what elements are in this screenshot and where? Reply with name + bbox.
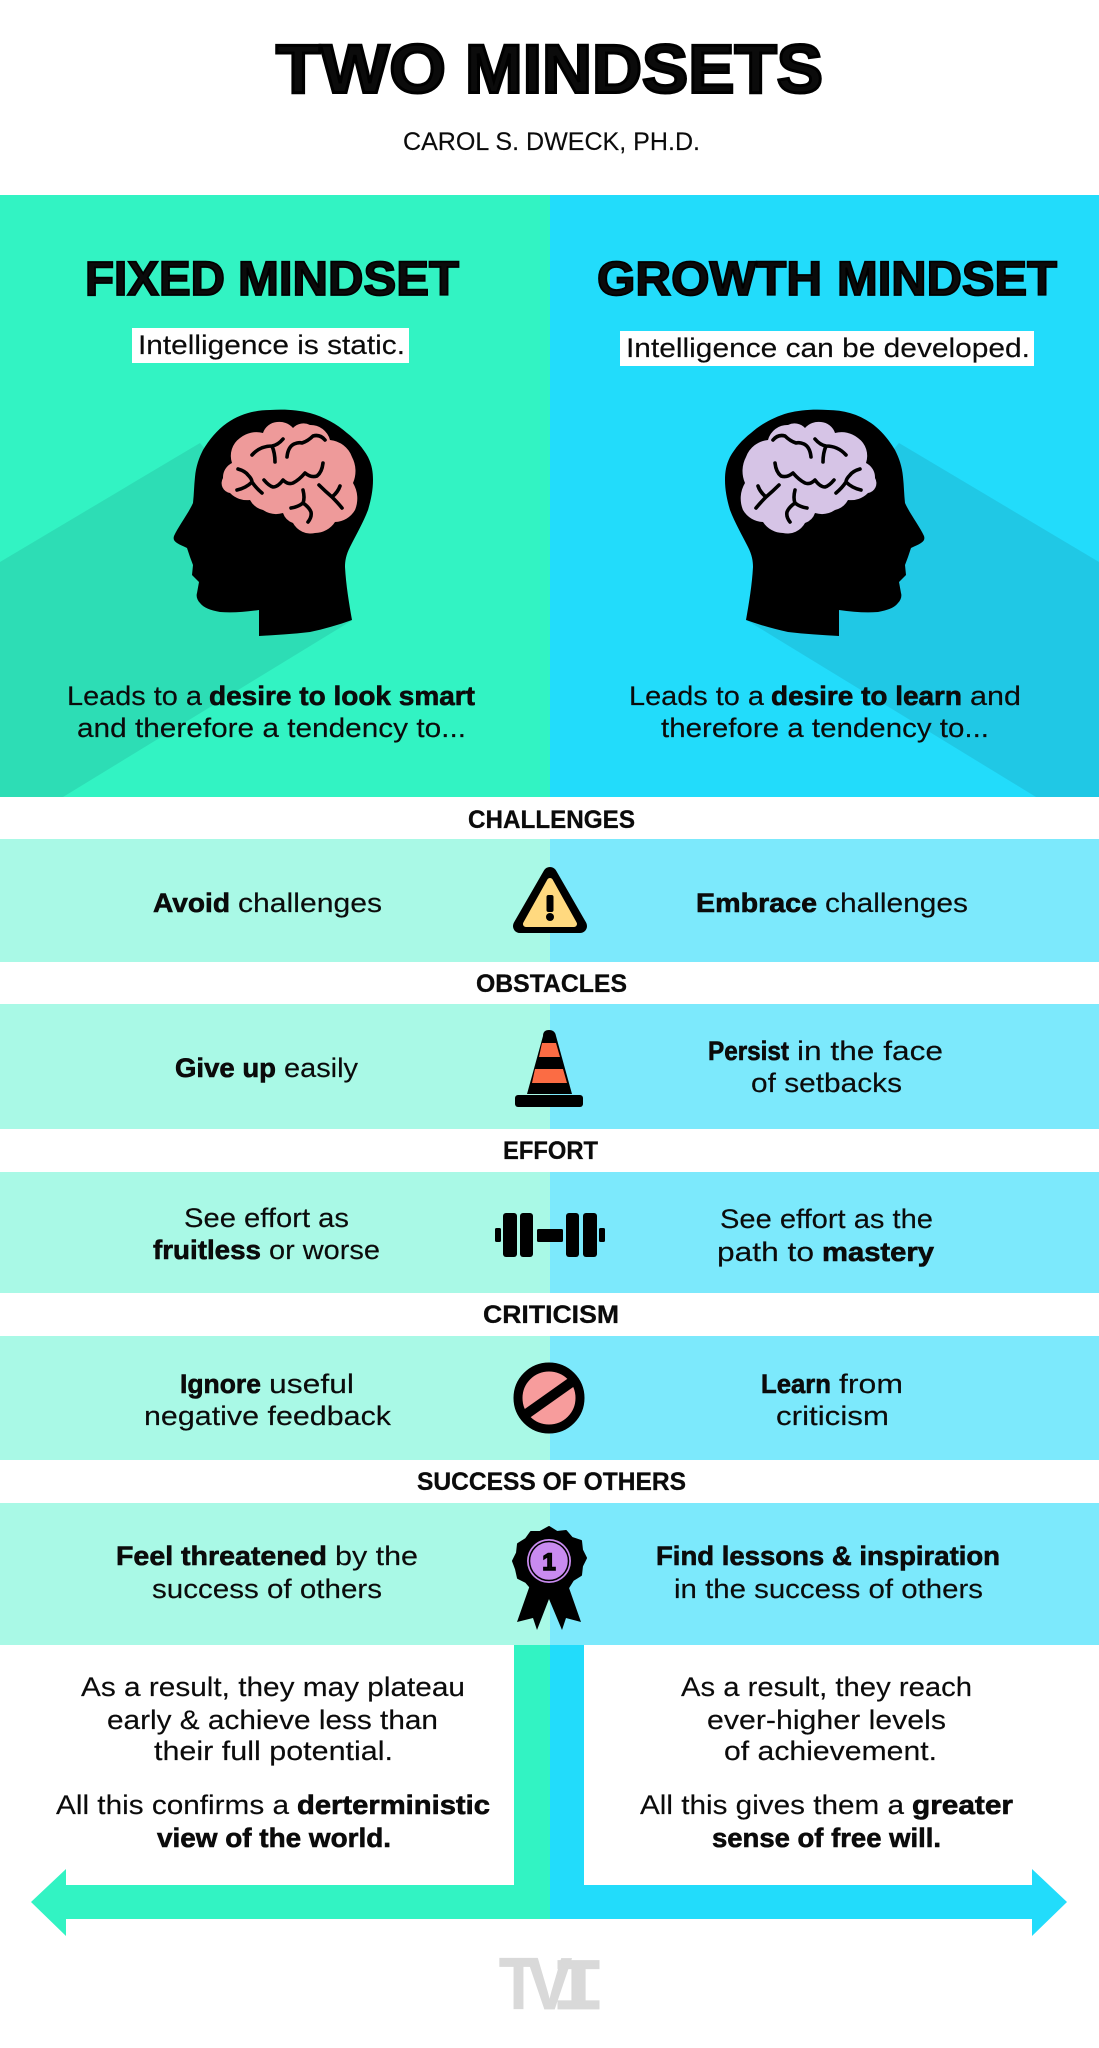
text: fixed mindset leads to: and therefore a tendency to... xyxy=(77,713,466,743)
logo: TVI: T xyxy=(499,1944,538,2025)
panel: fixed mindset xyxy=(0,195,550,797)
text: fixed mindset result: As a result, they may plateau xyxy=(81,1672,465,1702)
text: fixed mindset result: All this confirms a xyxy=(56,1790,290,1820)
logo: TVI: V xyxy=(527,1944,572,2025)
icon: warning triangle xyxy=(520,874,580,926)
text: see effort as the path to mastery xyxy=(717,1204,934,1267)
row: obstacles xyxy=(0,970,1099,1129)
logo: TVI xyxy=(499,1944,606,2031)
text: persist in the face of setbacks: Persist xyxy=(708,1036,789,1066)
text: fixed mindset result: early & achieve less than xyxy=(107,1705,438,1735)
text: feel threatened: by the xyxy=(335,1541,418,1571)
icon: head with lilac brain xyxy=(725,410,924,636)
text: growth mindset leads to: therefore a tendency to... xyxy=(661,713,989,743)
text: embrace challenges xyxy=(696,888,968,918)
text: persist in the face of setbacks xyxy=(708,1036,943,1098)
text: learn from criticism: from xyxy=(839,1369,903,1399)
heading: fixed mindset xyxy=(85,253,459,306)
text: see effort as the path to mastery: path to xyxy=(717,1237,814,1267)
subtitle: author: CAROL S. DWECK, PH.D. xyxy=(403,128,700,156)
heading: growth mindset: MINDSET xyxy=(837,253,1057,306)
text: see effort as fruitless or worse: See effort as xyxy=(184,1203,349,1233)
row: effort xyxy=(0,1137,1099,1293)
text: growth mindset result: of achievement. xyxy=(724,1736,937,1766)
text: fixed mindset result xyxy=(56,1672,490,1853)
text: feel threatened: success of others xyxy=(152,1574,382,1604)
text: growth mindset leads to: desire to learn xyxy=(771,681,962,711)
icon: prohibition sign xyxy=(518,1367,580,1429)
head shadow: growth xyxy=(748,443,1099,797)
text: find lessons and inspiration xyxy=(656,1541,1000,1604)
row: criticism xyxy=(0,1301,1099,1460)
icon: award ribbon xyxy=(513,1527,586,1630)
row: success of others xyxy=(0,1468,1099,1645)
connector: green stem and left arrow xyxy=(31,1645,550,1936)
heading: growth mindset: GROWTH xyxy=(597,253,822,306)
text: fixed mindset leads to xyxy=(67,681,475,743)
text: embrace challenges: challenges xyxy=(825,888,968,918)
text: fixed mindset result: view of the world. xyxy=(157,1823,391,1853)
text: embrace challenges: Embrace xyxy=(696,888,817,918)
logo: TVI: I xyxy=(551,1948,606,2031)
text: fixed mindset result: their full potential. xyxy=(154,1736,393,1766)
connector: blue stem and right arrow xyxy=(550,1645,1067,1936)
text: see effort as the path to mastery: See effort as the xyxy=(720,1204,933,1234)
text: give up easily xyxy=(175,1053,359,1083)
text: growth mindset result: All this gives them a xyxy=(640,1790,905,1820)
text: see effort as the path to mastery: mastery xyxy=(822,1237,934,1267)
text: see effort as fruitless or worse: fruitless xyxy=(153,1235,261,1265)
text: give up easily: Give up xyxy=(175,1053,276,1083)
text: ignore useful negative feedback xyxy=(144,1369,392,1431)
text: find lessons and inspiration: Find lessons & inspiration xyxy=(656,1541,1000,1571)
icon: award ribbon: 1 xyxy=(542,1549,556,1576)
text: ignore useful negative feedback: negative feedback xyxy=(144,1401,392,1431)
text: avoid challenges: challenges xyxy=(238,888,382,918)
heading: fixed mindset: FIXED xyxy=(85,253,225,306)
text: growth mindset leads to: and xyxy=(970,681,1021,711)
text: growth mindset result: greater xyxy=(912,1790,1013,1820)
text: growth mindset leads to xyxy=(629,681,1021,743)
text: give up easily: easily xyxy=(284,1053,359,1083)
text: find lessons and inspiration: in the success of others xyxy=(674,1574,983,1604)
label: effort: EFFORT xyxy=(503,1137,598,1165)
label: challenges: CHALLENGES xyxy=(468,806,635,834)
text: feel threatened: Feel threatened xyxy=(116,1541,327,1571)
text: growth mindset result: sense of free will. xyxy=(712,1823,941,1853)
icon: head with pink brain xyxy=(174,410,373,636)
text: learn from criticism: Learn xyxy=(761,1369,831,1399)
text: growth mindset result xyxy=(640,1672,1013,1853)
text: feel threatened xyxy=(116,1541,418,1604)
text: fixed mindset leads to: desire to look smart xyxy=(209,681,475,711)
text: fixed mindset leads to: Leads to a xyxy=(67,681,203,711)
text: see effort as fruitless or worse: or worse xyxy=(269,1235,380,1265)
panel: growth mindset xyxy=(550,195,1099,797)
label: criticism: CRITICISM xyxy=(483,1301,619,1329)
heading: growth mindset xyxy=(597,253,1057,306)
text: ignore useful negative feedback: Ignore xyxy=(180,1369,261,1399)
title xyxy=(276,30,823,108)
heading: fixed mindset: MINDSET xyxy=(238,253,459,306)
text: persist in the face of setbacks: in the face xyxy=(797,1036,943,1066)
text: fixed mindset result: derterministic xyxy=(297,1790,490,1820)
icon: dumbbell xyxy=(495,1213,605,1257)
title: MINDSETS xyxy=(465,30,823,108)
text: persist in the face of setbacks: of setbacks xyxy=(751,1068,902,1098)
text: growth mindset leads to: Leads to a xyxy=(629,681,765,711)
head shadow: fixed xyxy=(0,443,351,797)
text: ignore useful negative feedback: useful xyxy=(269,1369,354,1399)
text: learn from criticism xyxy=(761,1369,903,1431)
tagline: intelligence can be developed: Intelligence can be developed. xyxy=(626,333,1030,363)
row: challenges xyxy=(0,806,1099,962)
text: growth mindset result: ever-higher levels xyxy=(707,1705,946,1735)
label: obstacles: OBSTACLES xyxy=(476,970,627,998)
text: learn from criticism: criticism xyxy=(776,1401,889,1431)
text: avoid challenges xyxy=(153,888,382,918)
label: success of others: SUCCESS OF OTHERS xyxy=(417,1468,686,1496)
text: avoid challenges: Avoid xyxy=(153,888,230,918)
icon: traffic cone xyxy=(515,1030,583,1107)
title: TWO xyxy=(276,30,446,108)
tagline: intelligence is static: Intelligence is static. xyxy=(138,330,405,360)
text: see effort as fruitless or worse xyxy=(153,1203,380,1265)
text: growth mindset result: As a result, they reach xyxy=(681,1672,972,1702)
